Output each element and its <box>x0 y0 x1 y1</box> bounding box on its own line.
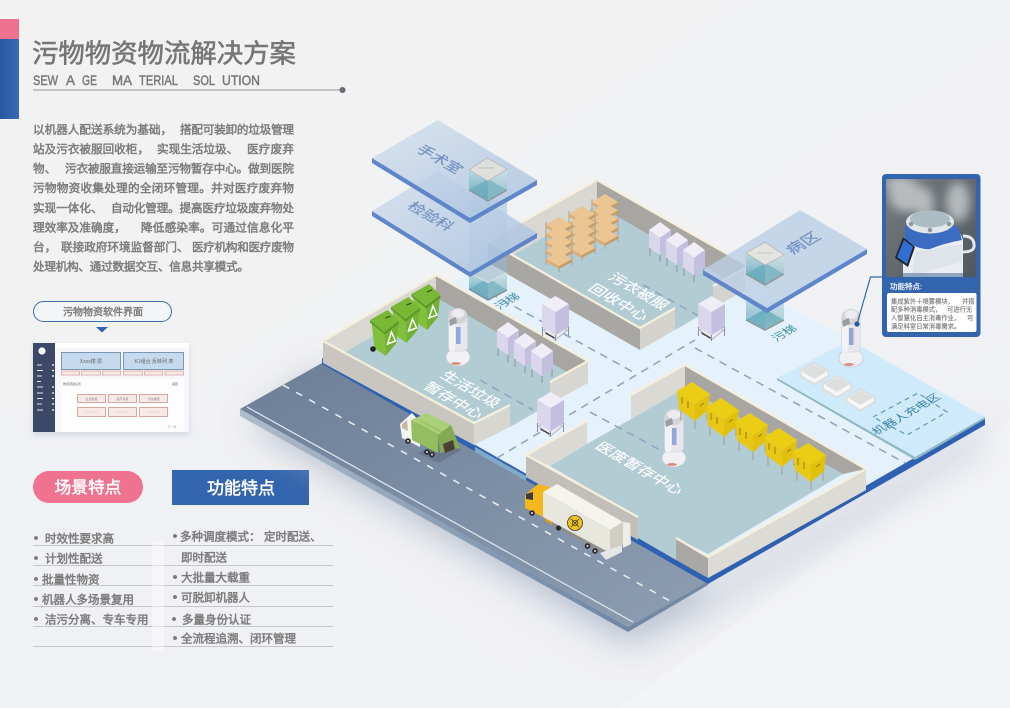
title: 污物物资物流解决方案 <box>32 38 296 68</box>
software screenshot: 生活垃圾 <box>85 396 98 401</box>
room label: laundry center: 污衣被服 <box>604 271 672 313</box>
subtitle: MA <box>112 72 133 88</box>
robot: charging area <box>839 309 863 367</box>
room label: medical waste center: 医废暂存中心 <box>591 440 687 498</box>
room label: laundry center: 回收中心 <box>584 282 652 324</box>
agv cart: corridor upper <box>542 296 569 341</box>
room: medical waste storage center <box>526 365 866 578</box>
intro paragraph: 污衣被服直接运输至污物暂存中心。做到医院 <box>65 162 294 176</box>
scene features list: 洁污分离、专车专用 <box>45 612 148 626</box>
elevator right lower cube <box>746 295 784 330</box>
label: ward: 病区 <box>782 230 825 257</box>
tag pointer <box>96 327 108 332</box>
software screenshot: 物流调度任务 <box>63 381 81 386</box>
software screenshot: K1组台 反映列 表 <box>135 358 173 365</box>
function features list: 大批量大载重 <box>181 570 250 584</box>
label: robot charging area: 机器人充电区 <box>869 391 944 437</box>
plate: laboratory <box>372 171 537 277</box>
yellow medical waste boxes <box>677 382 826 490</box>
domestic carts <box>497 322 553 383</box>
intro paragraph: 联接政府环境监督部门、 <box>61 240 189 254</box>
title rule with dot <box>33 87 346 93</box>
agv cart: corridor right <box>698 296 725 341</box>
intro paragraph: 物、 <box>33 162 56 176</box>
room label: domestic waste center <box>419 369 504 422</box>
intro paragraph: 污物物资收集处理的全闭环管理。并对医疗废弃物 <box>33 181 294 195</box>
garbage truck <box>400 413 461 463</box>
robot: waste room <box>446 308 470 366</box>
scene features list: 批量性物资 <box>42 572 100 586</box>
callout card: disinfection robot: 满足科室日常消毒需求。 <box>891 322 960 330</box>
callout leader <box>854 277 882 327</box>
charging bay bracket <box>873 393 947 435</box>
elevator left upper cube <box>469 158 507 201</box>
subtitle: A <box>66 72 76 88</box>
intro paragraph: 台， <box>33 240 56 254</box>
road <box>240 363 708 632</box>
charging zone floor <box>777 340 985 460</box>
intro paragraph: 自动化管理。提高医疗垃圾废弃物处 <box>111 201 294 215</box>
function features header <box>172 470 309 505</box>
intro paragraph: 以机器人配送系统为基础， <box>33 122 172 136</box>
callout card: disinfection robot: 配多种消毒模式， <box>891 304 941 314</box>
software screenshot: 下一步 <box>167 424 177 429</box>
intro paragraph: 处理机构、通过数据交互、信息共享模式。 <box>33 260 249 274</box>
plate: operating room <box>372 120 537 223</box>
elevator right upper cube <box>746 242 784 285</box>
room: laundry recycling center <box>488 180 745 350</box>
subtitle <box>33 72 260 88</box>
scene features list <box>34 532 149 626</box>
function features list: 定时配送、 <box>264 530 322 544</box>
intro paragraph <box>33 122 294 274</box>
robot: medical room <box>662 409 686 467</box>
scene features pill: 场景特点 <box>55 478 121 497</box>
callout card: disinfection robot <box>882 174 980 337</box>
intro paragraph: 站及污衣被服回收柜， <box>33 142 149 156</box>
scene features list: 计划性配送 <box>45 552 103 566</box>
agv cart: corridor lower <box>537 392 564 437</box>
label: operating room: 手术室 <box>412 143 466 177</box>
charging pads <box>800 363 874 410</box>
callout card: disinfection robot: 人智慧化自主消毒作业， <box>891 313 960 322</box>
software screenshot: 返回 <box>172 381 178 386</box>
intro paragraph: 医疗废弃 <box>247 142 294 156</box>
subtitle: SOL <box>193 72 215 88</box>
subtitle: UTION <box>222 72 260 88</box>
hospital floor platform <box>322 199 985 584</box>
software screenshot: Xxxx楼 层 <box>80 358 102 365</box>
subtitle: TERIAL <box>139 72 178 88</box>
intro paragraph: 实现生活垃圾、 <box>157 142 238 156</box>
room label: domestic waste center: 暂存中心 <box>419 380 487 422</box>
elevator shaft left lower <box>469 200 507 282</box>
laundry shelves <box>546 194 618 272</box>
elevator left lower cube <box>469 263 507 300</box>
scene features pill <box>33 471 143 503</box>
list divider lines <box>33 546 333 646</box>
room label: domestic waste center: 生活垃圾 <box>436 369 504 411</box>
function features list: 可脱卸机器人 <box>181 590 250 604</box>
function features list: 多量身份认证 <box>182 612 251 626</box>
yellow medical waste truck <box>525 484 631 560</box>
software interface tag: 污物物资软件界面 <box>63 306 143 318</box>
callout card: disinfection robot: 可进行无 <box>947 304 973 314</box>
callout card: disinfection robot: 并搭 <box>962 296 975 306</box>
intro paragraph: 理效率及准确度， <box>33 220 126 234</box>
intro paragraph: 实现一体化、 <box>33 201 103 215</box>
platform shadow <box>250 370 985 645</box>
software screenshot <box>33 343 189 432</box>
function features list <box>172 530 322 646</box>
intro paragraph: 降低感染率。可通过信息化平 <box>141 220 294 234</box>
function features list: 多种调度模式： <box>180 530 260 544</box>
function features header: 功能特点 <box>207 479 275 498</box>
software screenshot: 医疗垃圾 <box>116 396 129 401</box>
intro paragraph: 医疗机构和医疗废物 <box>192 240 294 254</box>
intro paragraph: 搭配可装卸的垃圾管理 <box>180 122 294 136</box>
subtitle: GE <box>82 72 97 88</box>
software interface tag <box>34 302 172 322</box>
plate: ward <box>703 210 867 313</box>
room label: laundry center <box>584 271 672 324</box>
label: laboratory: 检验科 <box>403 200 457 234</box>
callout card: disinfection robot: 可 <box>967 314 973 322</box>
callout card: disinfection robot: 功能特点: <box>890 281 922 291</box>
software screenshot: 污衣被服 <box>147 396 160 401</box>
corner accent blocks <box>0 19 19 119</box>
subtitle: SEW <box>33 72 59 88</box>
green bins <box>370 284 440 356</box>
scene features list: 机器人多场景复用 <box>42 592 134 606</box>
callout card: disinfection robot: 集成紫外＋喷雾模块， <box>891 296 954 306</box>
room: domestic waste storage center <box>323 275 588 445</box>
label: right dirty elevator: 污梯 <box>768 323 800 343</box>
scene features list: 时效性要求高 <box>45 532 114 546</box>
function features list: 全流程追溯、闭环管理 <box>181 632 296 646</box>
function features list: 即时配送 <box>181 550 227 564</box>
card photo: robot with mist <box>884 176 976 277</box>
laundry carts <box>649 222 705 282</box>
label: left dirty elevator: 污梯 <box>491 291 523 311</box>
floor route dashes <box>480 285 905 463</box>
